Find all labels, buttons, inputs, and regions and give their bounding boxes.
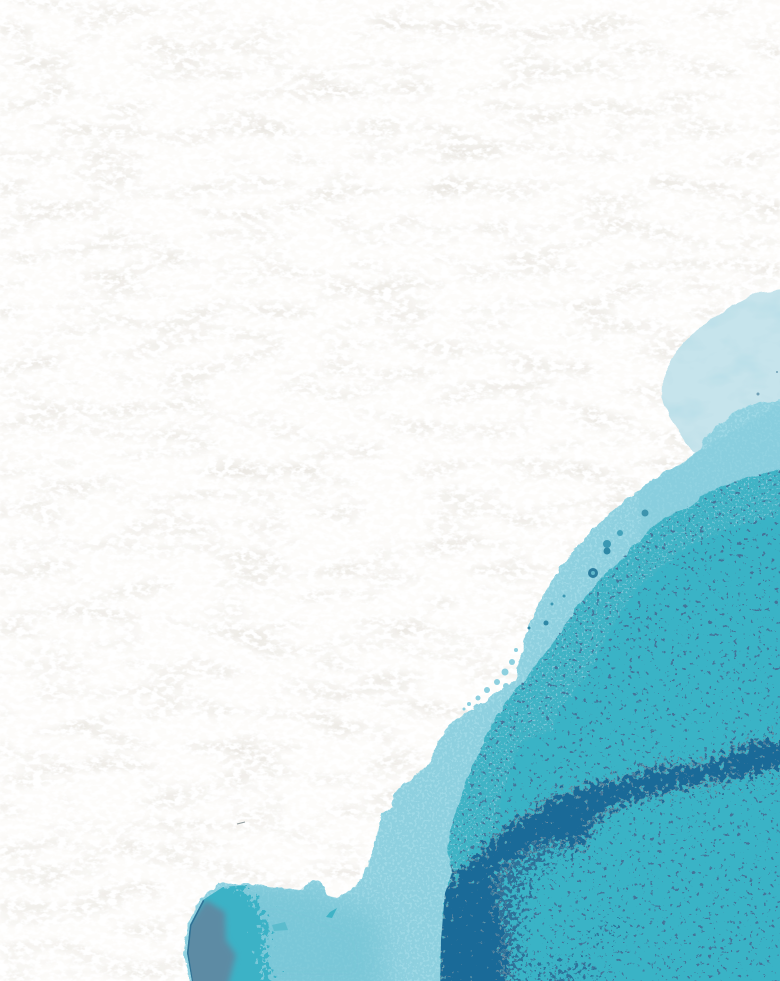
left rim line (187, 900, 203, 981)
dark blue pigment streak (440, 470, 780, 981)
fragmented edge speckles (462, 648, 518, 710)
pale blue wash at top right (662, 288, 780, 470)
blue-grey pool at lower left (187, 885, 337, 981)
small paper fleck (237, 822, 245, 824)
medium teal wash (184, 400, 780, 981)
lower left pool tone (185, 405, 780, 981)
saturated teal wash (440, 470, 780, 981)
pigment granulation spots (528, 371, 778, 630)
inner darker core (445, 510, 780, 981)
